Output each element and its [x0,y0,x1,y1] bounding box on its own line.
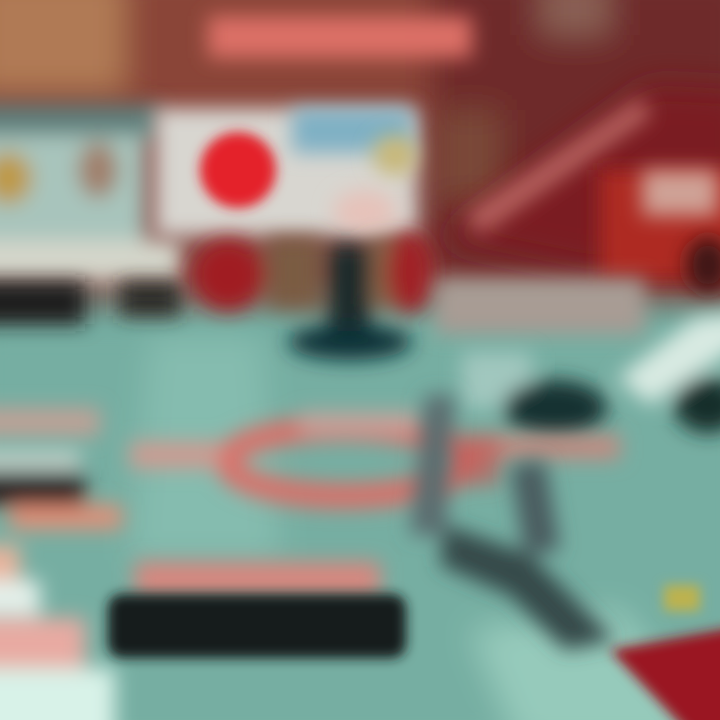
floor [0,322,720,720]
seated figures and dark bases [0,232,434,360]
yellow floor mark [664,585,700,611]
bottom dark bench [108,562,406,658]
grey stand [410,395,615,650]
floor emblem [0,408,620,496]
central poster [155,108,417,236]
wall background [0,0,720,280]
bottom right red mat [610,625,720,720]
left white panels [0,105,180,282]
right red staircase [440,85,720,293]
right floor objects [462,312,720,436]
grey counter band [435,278,645,334]
left floor stack [0,450,122,720]
red banner [208,16,472,58]
